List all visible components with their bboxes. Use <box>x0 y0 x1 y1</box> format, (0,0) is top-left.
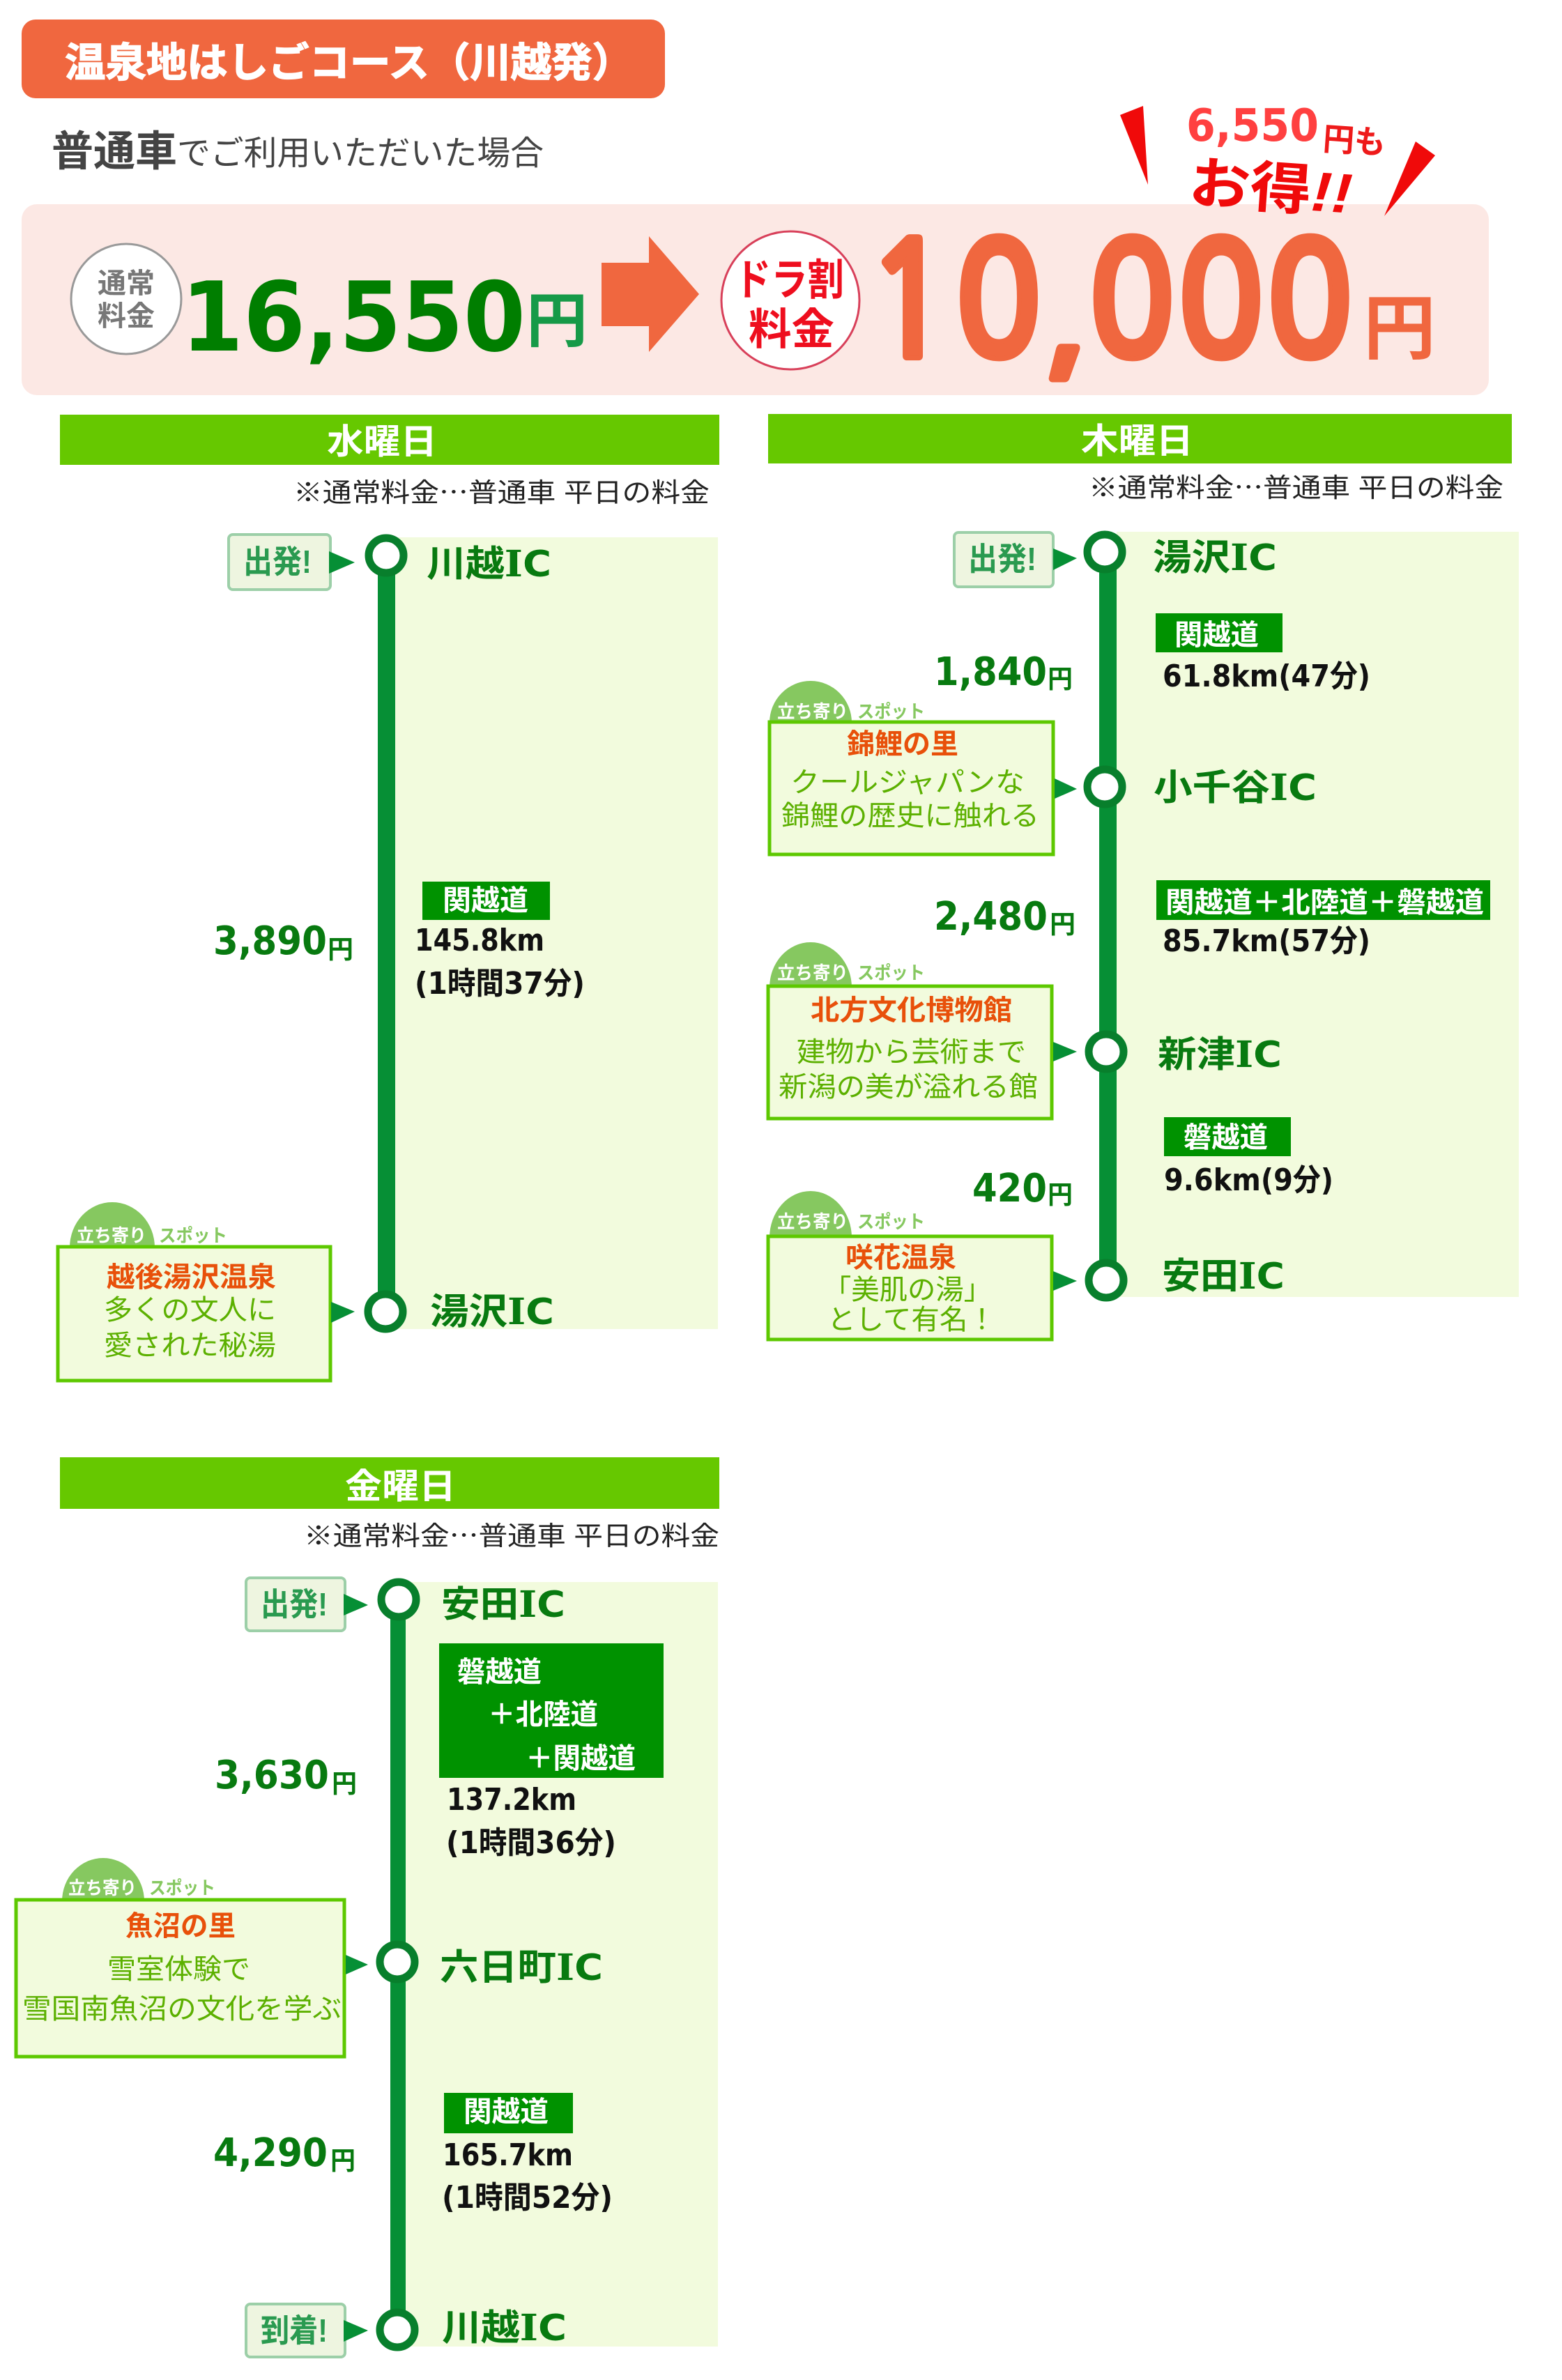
heading: Wednesday <box>60 415 719 465</box>
spot: Echigo Yuzawa: 立ち寄り <box>77 1225 146 1246</box>
icon: discount price badge: 料金 <box>749 306 834 354</box>
subtitle: for regular cars: 普通車 <box>52 128 177 175</box>
spot: Nishikigoi no Sato: クールジャパンな <box>790 767 1025 798</box>
road info: segment 2 <box>1156 880 1490 959</box>
spot: Sakihana Onsen: 「美肌の湯」 <box>823 1275 992 1305</box>
road info: segment 1: 61.8km(47分) <box>1163 659 1370 694</box>
spot: Uonuma no Sato: 雪国南魚沼の文化を学ぶ <box>22 1994 342 2025</box>
road info <box>415 882 585 1001</box>
title banner: 温泉地はしごコース（川越発） <box>65 40 633 86</box>
route background <box>395 537 718 1329</box>
spot: Nishikigoi no Sato <box>769 681 1077 854</box>
subtitle: for regular cars: でご利用いただいた場合 <box>177 135 544 172</box>
fare: segment 2: 円 <box>1050 910 1075 939</box>
spot: Echigo Yuzawa: 愛された秘湯 <box>104 1330 276 1361</box>
station: Yasuda IC <box>1089 1255 1285 1298</box>
icon: discount price badge <box>721 231 859 369</box>
start marker: 出発! <box>243 544 312 580</box>
icon: regular price badge <box>71 244 181 354</box>
spot: Echigo Yuzawa: スポット <box>159 1225 227 1246</box>
spot: Nishikigoi no Sato: 立ち寄り <box>777 701 848 722</box>
route line <box>390 1615 406 2310</box>
road info: segment 2: 関越道 <box>464 2096 549 2128</box>
spot: Nishikigoi no Sato: 錦鯉の歴史に触れる <box>781 801 1039 831</box>
station: Yasuda IC <box>381 1582 565 1626</box>
station: Kawagoe IC: 川越IC <box>427 543 551 585</box>
subtitle: for regular cars <box>52 128 544 175</box>
station: Yasuda IC: 安田IC <box>1162 1255 1285 1298</box>
fare: 3,890 <box>213 919 327 964</box>
road info: segment 3 <box>1164 1117 1333 1198</box>
station: Muikamachi IC <box>380 1944 603 1989</box>
road info: segment 1: 磐越道 <box>457 1656 542 1688</box>
station: Yuzawa IC: 湯沢IC <box>430 1291 554 1333</box>
start marker <box>229 535 355 590</box>
spot: Hoppo Bunka Museum: 建物から芸術まで <box>797 1037 1026 1068</box>
heading: Thursday: 木曜日 <box>1081 422 1193 461</box>
station: Yuzawa IC: 湯沢IC <box>1153 537 1277 579</box>
note: ※通常料金 …普通車 平日の料金 <box>304 1514 719 1553</box>
fare: segment 2: 4,290 <box>213 2131 328 2176</box>
heading: Friday <box>60 1457 719 1509</box>
fare: segment 2: 2,480 <box>934 894 1048 939</box>
panel: Thursday <box>768 414 1519 1339</box>
station: Yuzawa IC <box>1087 535 1277 579</box>
road info: (1時間37分) <box>415 966 585 1001</box>
fare: 円 <box>328 935 353 964</box>
fare: segment 1: 3,630 <box>215 1753 329 1798</box>
note: ※通常料金 …普通車 平日の料金 <box>1089 466 1503 505</box>
road info: segment 2: 85.7km(57分) <box>1163 923 1370 959</box>
start marker: 出発! <box>261 1586 328 1622</box>
station: Kawagoe IC <box>369 538 551 585</box>
station: Kawagoe IC: 川越IC <box>442 2307 567 2349</box>
road info: segment 2: 165.7km <box>443 2137 573 2173</box>
route line <box>378 565 395 1307</box>
panel: Wednesday <box>58 415 719 1381</box>
note: ※通常料金 …普通車 平日の料金 <box>293 471 710 509</box>
panel: Friday <box>16 1457 719 2357</box>
station: Niitsu IC <box>1089 1034 1282 1076</box>
spot: Sakihana Onsen: 咲花温泉 <box>845 1243 956 1273</box>
station: Kawagoe IC <box>380 2307 567 2349</box>
spot: Nishikigoi no Sato: 錦鯉の里 <box>847 729 958 760</box>
regular price: 円 <box>526 288 588 355</box>
heading: Thursday <box>768 414 1512 463</box>
callout: savings: 円も <box>1322 121 1387 161</box>
regular price: 16,550 <box>181 261 526 374</box>
road info: segment 1: ＋北陸道 <box>488 1698 598 1730</box>
heading: Friday: 金曜日 <box>345 1467 456 1506</box>
station: Niitsu IC: 新津IC <box>1158 1034 1282 1076</box>
spot: Hoppo Bunka Museum: スポット <box>857 962 925 983</box>
station: Yasuda IC: 安田IC <box>441 1583 565 1626</box>
station: Muikamachi IC: 六日町IC <box>440 1947 603 1989</box>
road info: segment 1 <box>439 1643 664 1861</box>
station: Ojiya IC: 小千谷IC <box>1154 767 1317 809</box>
road info: segment 2: (1時間52分) <box>442 2180 613 2216</box>
route background <box>1117 532 1519 1297</box>
road info: segment 3: 磐越道 <box>1184 1121 1268 1153</box>
fare: segment 3: 円 <box>1048 1181 1073 1209</box>
spot: Hoppo Bunka Museum: 新潟の美が溢れる館 <box>779 1072 1038 1103</box>
fare: segment 1: 円 <box>1048 665 1073 693</box>
road info: 145.8km <box>415 923 544 958</box>
spot: Uonuma no Sato: 魚沼の里 <box>125 1911 236 1942</box>
spot: Sakihana Onsen: 立ち寄り <box>777 1211 848 1232</box>
icon: regular price badge: 通常 <box>98 268 155 299</box>
road info: segment 1: (1時間36分) <box>446 1825 616 1861</box>
road info: segment 2: 関越道＋北陸道＋磐越道 <box>1165 886 1484 919</box>
start marker <box>246 1578 368 1631</box>
start marker <box>954 532 1077 587</box>
title banner <box>22 20 665 98</box>
station: Yuzawa IC <box>368 1291 554 1333</box>
fare: segment 3: 420 <box>972 1166 1047 1211</box>
arrival marker: 到着! <box>261 2312 328 2349</box>
discount price: 円 <box>1363 289 1436 369</box>
start marker: 出発! <box>968 541 1036 577</box>
arrival marker <box>246 2304 368 2357</box>
spot: Hoppo Bunka Museum: 立ち寄り <box>777 962 848 983</box>
discount price: 10,000 <box>865 224 1354 382</box>
icon: discount price badge: ドラ割 <box>735 256 844 305</box>
spot: Nishikigoi no Sato: スポット <box>857 701 925 722</box>
spot: Uonuma no Sato: 雪室体験で <box>107 1954 250 1985</box>
route line <box>1099 568 1117 1269</box>
fare: segment 1: 1,840 <box>934 650 1047 695</box>
spot: Echigo Yuzawa: 多くの文人に <box>104 1295 276 1326</box>
road info: segment 1: ＋関越道 <box>526 1742 636 1774</box>
road info: segment 1: 137.2km <box>447 1782 576 1818</box>
road info: 関越道 <box>443 884 528 916</box>
callout: savings <box>1120 100 1435 225</box>
spot: Uonuma no Sato <box>16 1858 368 2057</box>
spot: Echigo Yuzawa <box>58 1202 355 1381</box>
fare: segment 2: 円 <box>330 2147 355 2175</box>
spot: Echigo Yuzawa: 越後湯沢温泉 <box>107 1262 276 1293</box>
road info: segment 3: 9.6km(9分) <box>1164 1162 1333 1198</box>
fare: segment 1: 円 <box>332 1769 357 1798</box>
callout: savings: お得!! <box>1187 152 1354 225</box>
road info: segment 2 <box>442 2093 613 2216</box>
spot: Sakihana Onsen <box>768 1191 1077 1339</box>
spot: Uonuma no Sato: 立ち寄り <box>68 1878 137 1898</box>
road info: segment 1: 関越道 <box>1174 619 1259 651</box>
arrow <box>602 236 699 352</box>
spot: Uonuma no Sato: スポット <box>149 1878 215 1898</box>
callout: savings: 6,550 <box>1186 100 1319 152</box>
spot: Sakihana Onsen: として有名！ <box>827 1305 996 1335</box>
road info: segment 1 <box>1156 613 1370 694</box>
spot: Hoppo Bunka Museum: 北方文化博物館 <box>811 995 1012 1026</box>
icon: regular price badge: 料金 <box>98 301 155 332</box>
spot: Hoppo Bunka Museum <box>768 942 1077 1119</box>
spot: Sakihana Onsen: スポット <box>857 1211 925 1232</box>
route background <box>406 1582 718 2347</box>
price banner <box>22 204 1489 395</box>
heading: Wednesday: 水曜日 <box>327 422 437 461</box>
